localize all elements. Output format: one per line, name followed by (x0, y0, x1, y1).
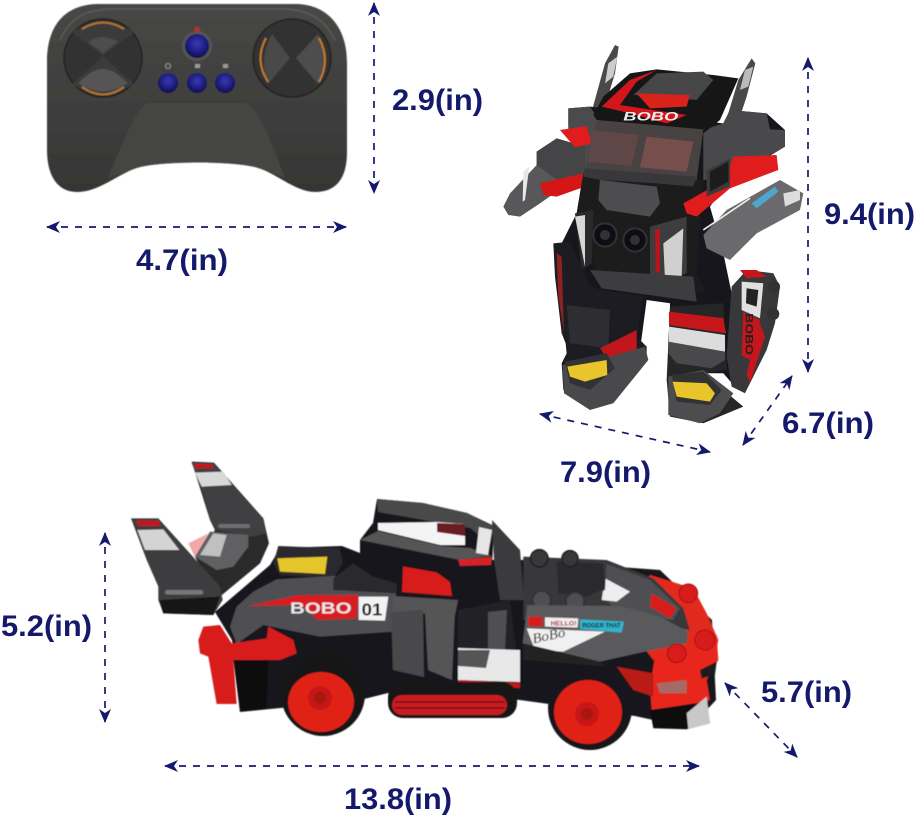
car rear body: 01 (362, 599, 383, 619)
robot right leg (667, 303, 743, 423)
car front body: BoBo (531, 626, 567, 647)
robot toy (503, 45, 803, 423)
arrow: robot depth (743, 376, 792, 445)
robot left arm (503, 126, 592, 217)
label: robot width: 7.9(in) (560, 456, 651, 489)
arrow: car width (725, 683, 797, 757)
robot head (583, 69, 738, 187)
robot silhouette base (557, 107, 785, 387)
right stick (253, 19, 331, 97)
car track panel (388, 682, 517, 718)
label: robot height: 9.4(in) (824, 198, 915, 231)
label: car length: 13.8(in) (344, 783, 452, 816)
car silhouette base (215, 546, 716, 728)
car cabin (391, 564, 520, 688)
car rear wings (131, 462, 269, 615)
arrow: car length (165, 765, 699, 767)
car rear body (198, 546, 397, 712)
blue buttons (158, 27, 235, 93)
label: car width: 5.7(in) (761, 676, 852, 709)
arrow: car height (104, 533, 106, 722)
robot right arm (683, 155, 803, 260)
remote controller (47, 4, 347, 192)
robot side panel (727, 270, 780, 393)
arrow: robot height (807, 58, 809, 372)
car front body: ROGER THAT (582, 623, 621, 630)
arrow: robot width (540, 414, 710, 452)
label: robot depth: 6.7(in) (782, 407, 874, 440)
label: controller width: 4.7(in) (136, 244, 228, 277)
arrow: controller width (47, 226, 346, 228)
robot head: BOBO (623, 110, 679, 124)
car front body: HELLO! (551, 621, 577, 627)
robot side panel: BOBO (743, 313, 755, 355)
label: car height: 5.2(in) (1, 610, 92, 643)
label: controller height: 2.9(in) (392, 84, 483, 117)
robot left leg (553, 242, 648, 410)
car rear body: BOBO (290, 600, 352, 617)
robot torso (575, 173, 707, 302)
car rear wheel (281, 652, 365, 736)
car front wheel (548, 666, 632, 750)
car roof arch (360, 499, 524, 600)
race car toy (131, 462, 718, 750)
arrow: controller height (373, 3, 375, 193)
left stick (64, 19, 142, 97)
car front body (523, 550, 718, 729)
